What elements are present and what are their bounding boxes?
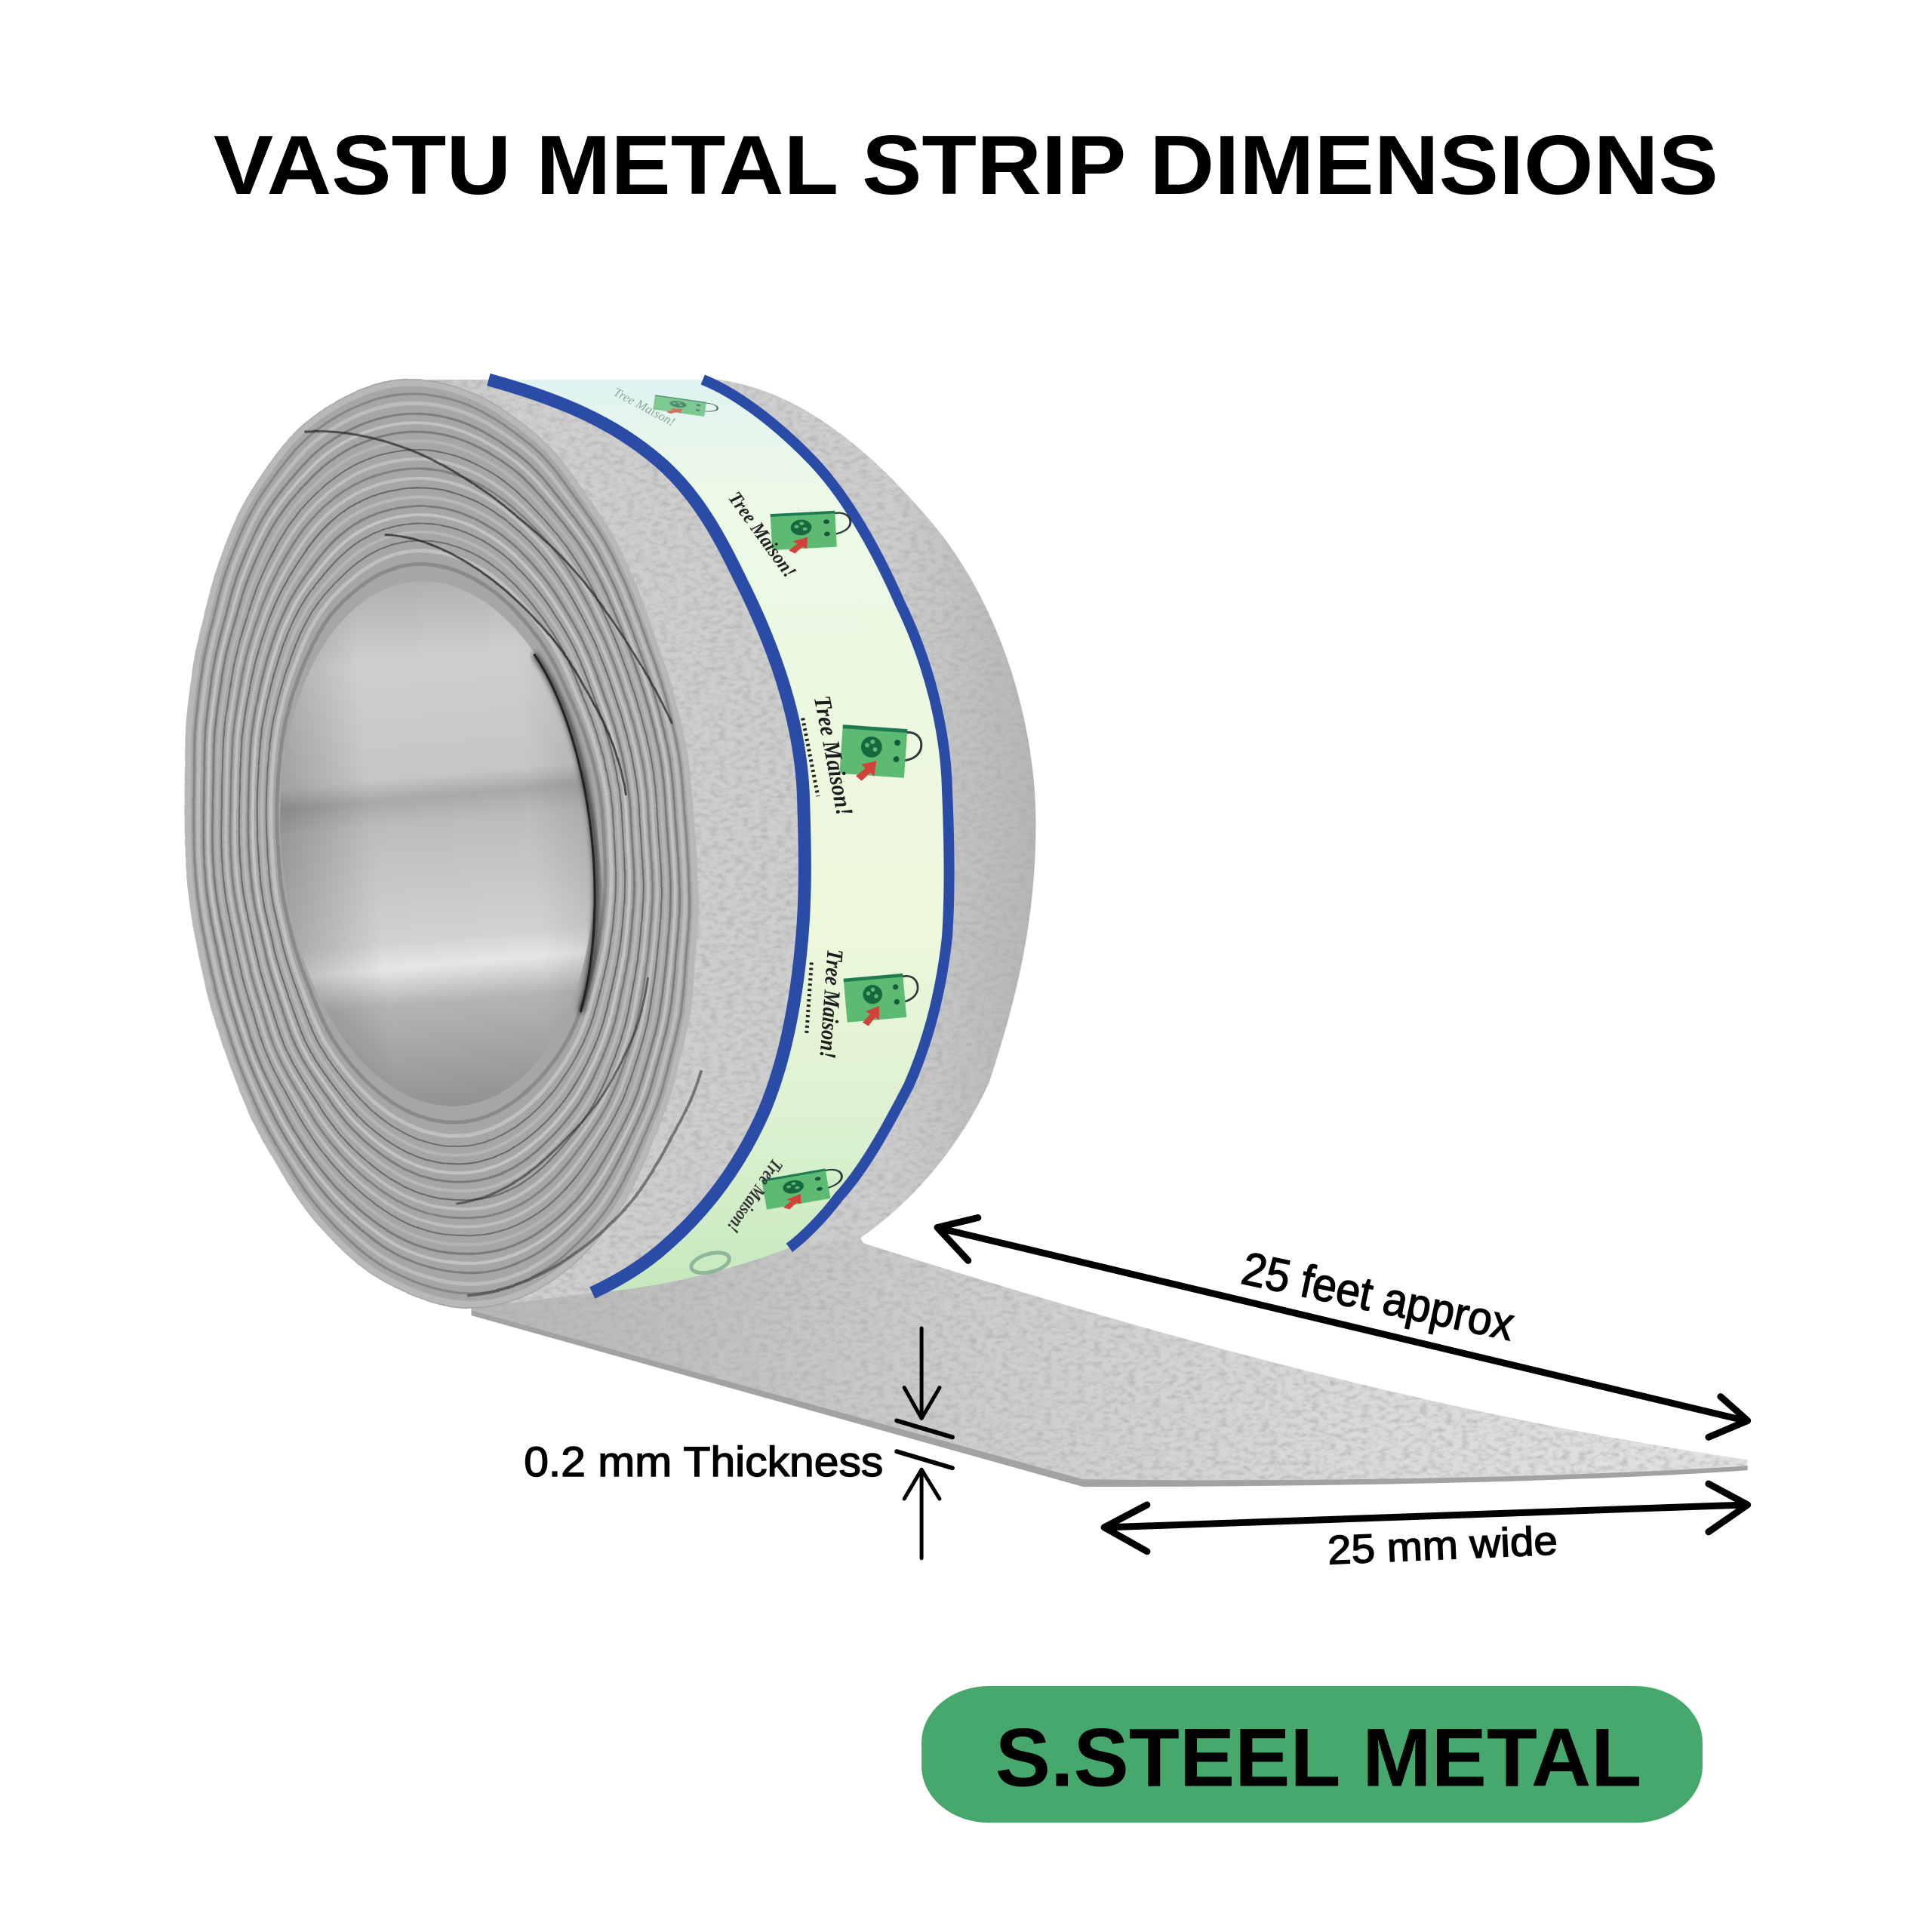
logo: top faint	[653, 395, 718, 420]
label band	[488, 380, 949, 1293]
coil outer surface	[300, 380, 1035, 1308]
strip edge	[471, 1310, 1748, 1487]
centre hole	[259, 568, 616, 1119]
logo: upper bag	[771, 510, 852, 555]
arrow: width 25 mm	[1104, 1484, 1748, 1552]
thickness marker	[897, 1328, 952, 1558]
label: 25 mm wide: 25 mm wide	[1327, 1518, 1558, 1574]
thickness ticks	[897, 1420, 952, 1468]
coil end face	[146, 358, 736, 1328]
logo text: top faint: Tree Maison!	[611, 386, 677, 429]
unrolled metal strip	[471, 1188, 1748, 1487]
left blue band	[488, 380, 804, 1293]
logo text: lower: Tree Maison!	[814, 948, 849, 1060]
material badge	[921, 1686, 1703, 1823]
wound layers	[146, 358, 736, 1328]
logo: cut-off bottom	[689, 1249, 731, 1277]
logo: lower bag	[844, 972, 921, 1028]
strip surface	[471, 1188, 1748, 1480]
right blue band	[703, 380, 949, 1247]
down arrow	[904, 1328, 940, 1418]
material badge: S.STEEL METAL	[995, 1712, 1641, 1804]
arrow: length 25 feet	[937, 1218, 1748, 1437]
logo text: upper: Tree Maison!	[724, 488, 801, 582]
logo: middle bag	[839, 724, 922, 785]
logo text: bottom: Tree Maison!	[723, 1155, 786, 1236]
metal coil	[146, 358, 1035, 1328]
label: 0.2 mm thickness: 0.2 mm Thickness	[524, 1438, 883, 1485]
title: VASTU METAL STRIP DIMENSIONS	[214, 118, 1718, 212]
label: 25 feet approx: 25 feet approx	[1237, 1242, 1518, 1351]
page content	[146, 118, 1748, 1823]
logo: bottom bag	[761, 1166, 846, 1214]
up arrow	[904, 1469, 940, 1558]
logo text: middle: Tree Maison!	[809, 694, 858, 818]
